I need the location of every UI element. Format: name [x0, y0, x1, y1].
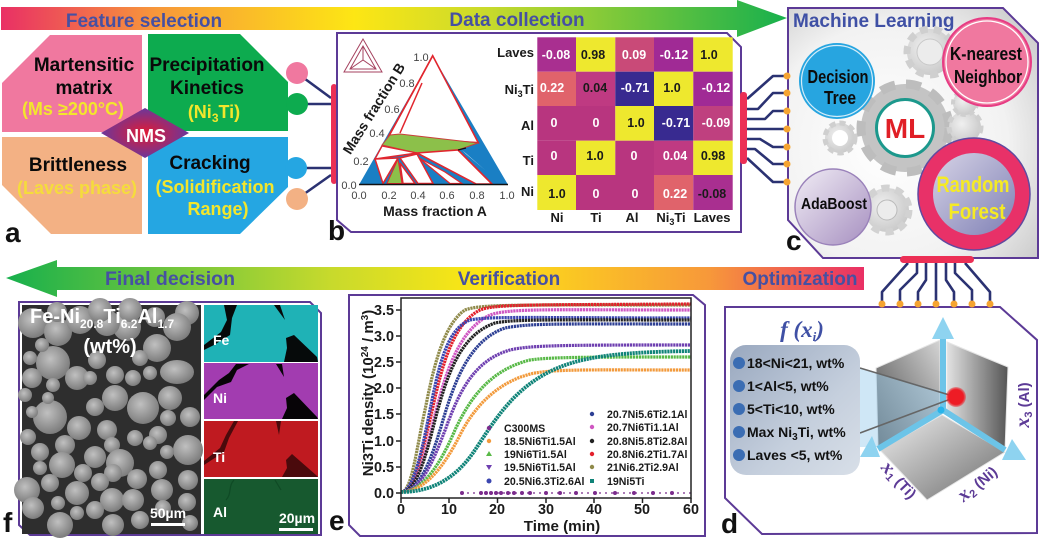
constraints box: Ti, wt% [798, 424, 846, 440]
label a: a [5, 217, 21, 248]
axis title: mass fraction B: Mass fraction B [339, 60, 408, 157]
constraints box: Laves <5, wt% [747, 447, 843, 463]
heading: feature selection: Feature selection [66, 11, 222, 32]
heatmap row labels: Laves [497, 45, 534, 60]
composition label: Al [137, 306, 157, 328]
panel b: data collection [328, 33, 741, 246]
center diamond: NMS: NMS [126, 126, 166, 146]
legend: 18.5Ni6Ti1.5Al [504, 436, 576, 448]
heatmap values: 0 [631, 149, 638, 163]
heatmap values: -0.12 [660, 48, 688, 62]
legend [486, 409, 688, 488]
axis label x2: (Ni) [968, 463, 1001, 495]
legend: 21Ni6.2Ti2.9Al [607, 462, 679, 474]
y axis title: 24 [360, 346, 371, 357]
heatmap values: 0.22 [663, 187, 687, 201]
x tick labels: 30 [538, 502, 554, 518]
sector: martensitic matrix: matrix [55, 78, 113, 99]
heatmap column labels: Al [626, 210, 638, 225]
axis label x2: 2 [967, 488, 980, 501]
heatmap values: -0.12 [702, 81, 730, 95]
legend: 20.8Ni6.2Ti1.7Al [607, 449, 688, 461]
sector: martensitic matrix: (Ms ≥200°C) [22, 99, 124, 119]
axis ticks and labels: 0.4 [410, 190, 426, 202]
constraints box: 1<Al<5, wt% [747, 378, 829, 394]
y tick labels: 2.0 [374, 381, 394, 397]
x tick labels: 40 [586, 502, 602, 518]
composition unit: (wt%) [83, 336, 137, 358]
x axis title: Time (min) [524, 518, 600, 535]
sector: cracking: Cracking [169, 153, 251, 174]
panel f: final decision micrographs [3, 298, 321, 538]
badge: random forest: Forest [948, 199, 1006, 224]
center diamond: NMS [101, 108, 189, 158]
label c: c [786, 225, 802, 256]
curves [401, 304, 691, 495]
label e: e [329, 505, 345, 536]
heatmap row labels [497, 45, 534, 199]
function label: f (x [780, 317, 813, 342]
x tick labels: 20 [489, 502, 505, 518]
axis ticks and labels: 0.2 [353, 156, 369, 168]
sector: brittleness [2, 137, 142, 234]
axis ticks and labels: 1.0 [499, 190, 515, 202]
scale bar 50um: 50µm [150, 505, 186, 521]
heatmap column labels: Ni [656, 210, 669, 225]
center badge: ML [876, 100, 934, 156]
sector: cracking: (Solidification [156, 177, 274, 197]
axis label x3: x [1012, 418, 1034, 429]
y axis title: Ni3Ti density (10 [360, 357, 377, 476]
axis label x3: 3 [1023, 412, 1035, 418]
label f: f [3, 507, 13, 538]
x tick labels: 50 [634, 502, 650, 518]
axis ticks and labels: 0.6 [439, 190, 455, 202]
heatmap row labels: Ni [505, 82, 518, 97]
SEM image [14, 298, 203, 538]
badge: adaboost [795, 169, 871, 245]
EDS map: Fe [204, 305, 318, 362]
sector: precipitation kinetics: 3 [212, 111, 219, 125]
axis ticks and labels: 0.4 [369, 128, 385, 140]
function label: ) [814, 317, 824, 342]
y tick labels: 3.0 [374, 329, 394, 345]
heatmap values: 0.04 [663, 149, 687, 163]
heatmap values: -0.71 [662, 116, 690, 130]
x tick labels: 10 [441, 502, 457, 518]
heatmap column labels: 3 [669, 217, 674, 227]
heatmap values: -0.08 [698, 187, 726, 201]
axis ticks and labels [341, 52, 515, 202]
heatmap values: 0 [551, 116, 558, 130]
connector: ML panel to optimization panel [878, 256, 994, 308]
function label: i [813, 329, 817, 344]
y tick labels: 3.5 [374, 303, 394, 319]
heatmap values: -0.71 [621, 81, 649, 95]
heatmap row labels: Ni [521, 184, 534, 199]
x tick labels: 0 [397, 502, 405, 518]
connector: data panel to ML panel [740, 72, 790, 186]
3D design space [860, 317, 1026, 500]
composition label: Ti [103, 306, 121, 328]
heatmap values [540, 48, 730, 201]
sector: brittleness: (Laves phase) [17, 178, 137, 198]
heatmap values: 0.09 [622, 48, 646, 62]
constraints box: 3 [792, 432, 798, 443]
constraints box: 18<Ni<21, wt% [747, 355, 845, 371]
heatmap values: 0.98 [581, 48, 605, 62]
EDS map: Fe: Fe [213, 332, 230, 348]
arrow: bottom workflow [6, 260, 864, 297]
badge: k-nearest neighbor: Neighbor [954, 67, 1022, 87]
y axis title: ) [360, 310, 377, 315]
EDS map: Al [204, 479, 318, 534]
composition label: 1.7 [157, 317, 174, 331]
legend: 19.5Ni6Ti1.5Al [504, 462, 576, 474]
legend: 19Ni5Ti [607, 476, 645, 488]
arrow: top workflow [1, 0, 787, 37]
x tick labels [397, 502, 699, 518]
badge: decision tree [799, 43, 875, 119]
sector: precipitation kinetics: Ti) [219, 102, 240, 122]
axis label x1: (Ti) [888, 471, 919, 503]
heatmap column labels: Ni [550, 210, 564, 225]
correlation heatmap [497, 37, 733, 227]
axis ticks and labels: 1.0 [413, 52, 429, 64]
badge: decision tree: Decision [808, 67, 868, 87]
icon: thermocalc logo [344, 39, 382, 72]
axis label x3: (Al) [1016, 382, 1033, 412]
heatmap values: 0 [593, 116, 600, 130]
axis ticks and labels: 0.8 [469, 190, 485, 202]
badge: k-nearest neighbor [943, 18, 1031, 106]
badge: k-nearest neighbor: K-nearest [950, 44, 1022, 64]
heatmap values: 0 [632, 187, 639, 201]
axis label x1: 1 [883, 471, 896, 484]
heatmap column labels [550, 210, 730, 227]
heading: machine learning: Machine Learning [793, 11, 955, 32]
legend: 20.7Ni6Ti1.1Al [607, 422, 679, 434]
axis ticks and labels: 0.6 [384, 104, 400, 116]
label b: b [328, 215, 345, 246]
constraints box: 5<Ti<10, wt% [747, 401, 835, 417]
axis ticks and labels: 0.0 [341, 180, 357, 192]
composition label: 20.8 [80, 317, 104, 331]
heatmap values: 1.0 [700, 48, 718, 62]
axis ticks and labels: 0.0 [351, 190, 367, 202]
y tick labels: 1.0 [374, 434, 394, 450]
axis label x2: x [952, 483, 975, 507]
heatmap row labels: Ti [523, 153, 534, 168]
panel a: feature selection [2, 34, 337, 248]
legend: 20.7Ni5.6Ti2.1Al [607, 409, 688, 421]
legend: 20.5Ni6.3Ti2.6Al [504, 476, 585, 488]
scale bar 20um: 20µm [279, 510, 315, 526]
legend: 20.8Ni5.8Ti2.8Al [607, 436, 688, 448]
panel d: optimization [721, 256, 1037, 539]
sector: cracking: Range) [187, 199, 249, 219]
y tick labels [374, 303, 394, 502]
sector: precipitation kinetics [148, 34, 288, 131]
heatmap row labels: 3 [518, 89, 523, 99]
heatmap values: 1.0 [586, 149, 604, 163]
panel e: verification chart [329, 295, 705, 536]
heading: data collection: Data collection [449, 10, 585, 31]
axis ticks and labels: 0.2 [381, 190, 397, 202]
EDS map: Ni: Ni [213, 390, 227, 406]
badge: decision tree: Tree [824, 88, 856, 108]
heatmap values: 0.22 [540, 81, 564, 95]
label d: d [721, 508, 738, 539]
sector: martensitic matrix: Martensitic [34, 55, 135, 76]
heading: final decision: Final decision [105, 268, 235, 290]
heatmap row labels: Al [521, 118, 534, 133]
heatmap values: 1.0 [663, 81, 681, 95]
sector: precipitation kinetics: (Ni [188, 102, 212, 122]
x tick labels: 60 [683, 502, 699, 518]
heatmap values: 1.0 [548, 187, 566, 201]
panel c: machine learning [740, 8, 1038, 258]
y tick labels: 1.5 [374, 407, 394, 423]
heatmap values: 0 [593, 187, 600, 201]
EDS map: Ni [204, 363, 318, 419]
heatmap column labels: Laves [694, 210, 730, 225]
ternary phase diagram [339, 52, 515, 219]
y tick labels: 0.5 [374, 460, 394, 476]
constraints box: Max Ni [747, 424, 792, 440]
axis title: mass fraction A: Mass fraction A [383, 203, 487, 219]
y tick labels: 0.0 [374, 486, 394, 502]
heatmap column labels: Ti [674, 210, 686, 225]
EDS map: Ti: Ti [213, 449, 225, 465]
sector: martensitic matrix [2, 35, 142, 132]
sector: precipitation kinetics: Kinetics [170, 78, 244, 99]
heatmap values: -0.09 [702, 116, 730, 130]
badge: adaboost: AdaBoost [801, 196, 867, 213]
legend: 19Ni6Ti1.5Al [504, 449, 567, 461]
heading: verification: Verification [458, 269, 560, 290]
heatmap values: 0.04 [583, 81, 607, 95]
heatmap values: -0.08 [542, 48, 570, 62]
badge: random forest [918, 138, 1030, 250]
axis label x1: x [876, 456, 899, 479]
heatmap column labels: Ti [590, 210, 602, 225]
EDS map: Ti [204, 421, 318, 477]
heatmap row labels: Ti [523, 82, 534, 97]
gears [825, 29, 981, 232]
badge: random forest: Random [936, 172, 1010, 197]
heading: optimization: Optimization [742, 269, 858, 290]
y axis title: / m [360, 320, 377, 346]
composition label: 6.2 [121, 317, 138, 331]
EDS map: Al: Al [213, 504, 227, 520]
composition label: Fe-Ni [30, 306, 80, 328]
center badge: ML: ML [885, 113, 925, 144]
axis ticks and labels: 0.8 [399, 78, 415, 90]
heatmap values: 1.0 [627, 116, 645, 130]
heatmap values: 0.98 [701, 149, 725, 163]
connector: feature nodes to data panel [285, 62, 337, 210]
heatmap values: 0 [551, 149, 558, 163]
sector: cracking [148, 137, 288, 234]
plot frame and ticks [396, 298, 691, 503]
legend: C300MS [504, 423, 545, 435]
y tick labels: 2.5 [374, 355, 394, 371]
sector: brittleness: Brittleness [29, 155, 127, 176]
constraints box [730, 345, 860, 475]
y axis title: 3 [360, 314, 371, 320]
sector: precipitation kinetics: Precipitation [149, 55, 265, 76]
